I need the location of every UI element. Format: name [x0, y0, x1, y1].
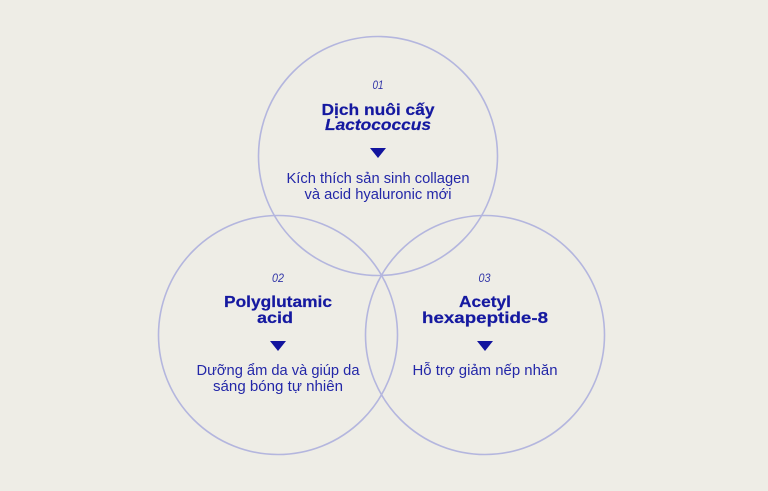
heading 03: hexapeptide-8	[422, 310, 548, 327]
heading 02: Polyglutamic	[224, 294, 332, 311]
description 01	[286, 171, 470, 203]
number 01: 01	[372, 80, 384, 92]
panel: item 01	[286, 80, 470, 203]
description 01: và acid hyaluronic mới	[304, 187, 452, 203]
description 02: Dưỡng ẩm da và giúp da	[196, 363, 360, 379]
heading 02	[224, 294, 332, 327]
panel: item 02	[196, 273, 360, 395]
panel: item 03	[412, 273, 558, 379]
number 03: 03	[478, 273, 491, 285]
icon: down arrow 03	[477, 341, 493, 351]
icon: down arrow 01	[370, 148, 386, 158]
heading 01: Lactococcus	[325, 117, 431, 134]
heading 02: acid	[257, 310, 293, 327]
description 02: sáng bóng tự nhiên	[213, 379, 343, 395]
heading 03	[422, 294, 548, 327]
description 01: Kích thích sản sinh collagen	[286, 171, 470, 187]
description 03: Hỗ trợ giảm nếp nhăn	[412, 362, 558, 379]
icon: down arrow 02	[270, 341, 286, 351]
description 02	[196, 363, 360, 395]
heading 01: Dịch nuôi cấy	[322, 102, 435, 119]
circle outline: top	[258, 36, 498, 276]
heading 03: Acetyl	[459, 294, 511, 311]
number 02: 02	[272, 273, 285, 285]
heading 01	[322, 102, 435, 134]
circle outline: bottom left	[158, 216, 398, 454]
circle outline: bottom right	[366, 216, 604, 454]
